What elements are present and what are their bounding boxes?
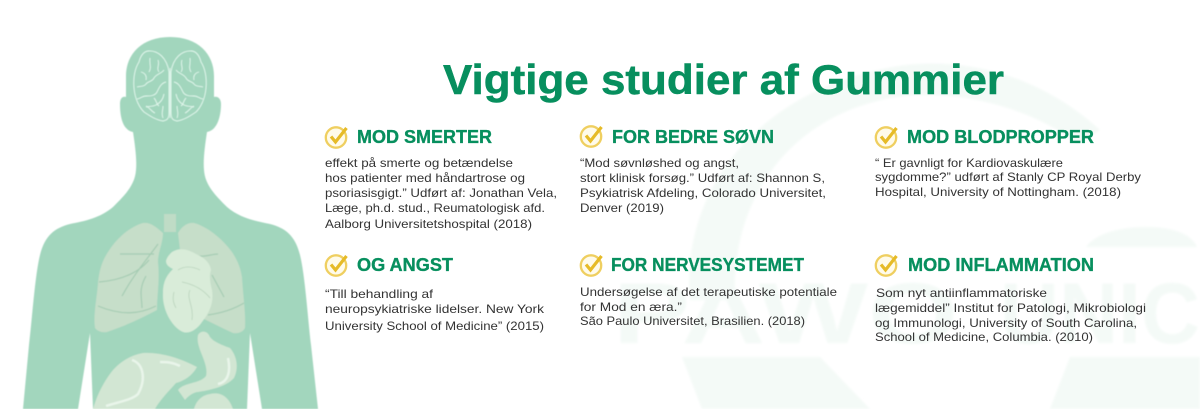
text block: “ Er gavnligt for Kardiovaskulære [875,156,1063,170]
text block: Læge, ph.d. stud., Reumatologisk afd. [325,201,545,215]
panel: mod inflammation [875,255,1146,344]
heading: OG ANGST [357,255,453,275]
panel: mod blodpropper [875,127,1141,199]
text block: og Immunologi, University of South Carolina, [875,316,1137,330]
text block: lægemiddel” Institut for Patologi, Mikrobiologi [875,301,1146,315]
text block [325,156,557,231]
icon: check [876,127,896,148]
icon: check [581,126,602,147]
text block [580,156,826,215]
text block [325,287,545,333]
text block: psoriasisgigt.” Udført af: Jonathan Vela, [325,186,557,200]
icon: check [326,255,346,276]
text block: Aalborg Universitetshospital (2018) [325,217,532,231]
text block: São Paulo Universitet, Brasilien. (2018) [580,314,805,328]
lungs [94,223,245,333]
text block: sygdomme?” udført af Stanly CP Royal Derby [875,170,1141,184]
icon: check [326,127,346,148]
liver and stomach [93,332,237,409]
title: Vigtige studier af Gummier [443,56,1004,103]
text block: University School of Medicine” (2015) [325,319,544,333]
heading: MOD INFLAMMATION [908,255,1094,275]
text block: Denver (2019) [580,201,664,215]
icon: check [581,255,602,276]
text block: “Mod søvnløshed og angst, [580,156,739,170]
heading: FOR BEDRE SØVN [612,127,774,147]
trachea [164,214,176,232]
heading: MOD SMERTER [357,127,492,147]
text block [580,285,837,328]
text block: neuropsykiatriske lidelser. New York [325,302,545,316]
text block [875,156,1141,199]
icon: check [876,255,896,276]
text block: Som nyt antiinflammatoriske [876,286,1047,300]
human body illustration [23,37,318,409]
background watermark logo: PAWO [613,266,958,362]
text block: Psykiatrisk Afdeling, Colorado Universitet, [580,186,826,200]
heading: MOD BLODPROPPER [907,127,1094,147]
text block: “Till behandling af [325,287,434,301]
body silhouette [23,37,318,409]
text block: stort klinisk forsøg.” Udført af: Shannon S, [580,171,825,185]
panel: for bedre søvn [580,126,826,215]
text block: Undersøgelse af det terapeutiske potentiale [580,285,837,299]
panel: og angst [325,255,545,333]
text block: for Mod en æra.” [580,300,682,314]
text block: School of Medicine, Columbia. (2010) [875,330,1093,344]
brain [134,51,206,121]
text block: hos patienter med håndartrose og [325,171,525,185]
panel: for nervesystemet [580,255,837,328]
heading: FOR NERVESYSTEMET [611,255,804,275]
heart [163,249,213,333]
background watermark logo [613,63,1200,409]
text block: Hospital, University of Nottingham. (2018) [875,185,1121,199]
panel: mod smerter [325,127,557,231]
text block: effekt på smerte og betændelse [325,156,513,170]
text block [875,286,1146,344]
